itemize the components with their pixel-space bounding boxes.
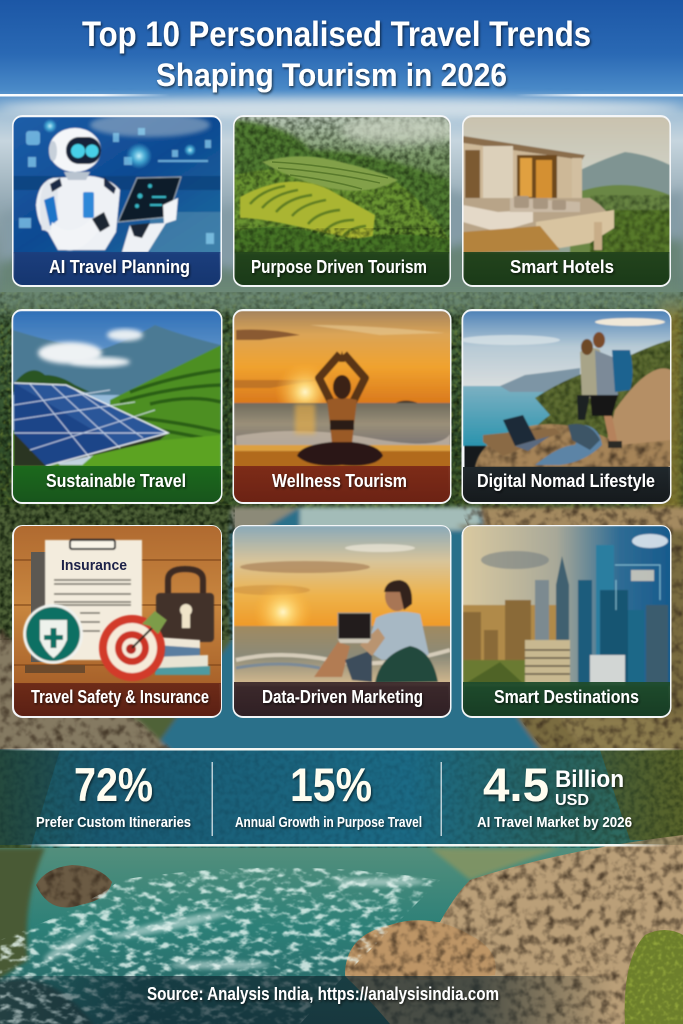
stat: 15%: Annual Growth in Purpose Travel bbox=[235, 814, 422, 831]
source bar: Source: Analysis India, https://analysisindia.com bbox=[147, 984, 499, 1004]
panel: Purpose Driven Tourism bbox=[234, 116, 460, 286]
title bbox=[82, 15, 591, 93]
image: solar panels and green terraces bbox=[13, 311, 222, 467]
panel: Travel Safety & Insurance bbox=[14, 526, 222, 718]
label: Digital Nomad Lifestyle: Digital Nomad Lifestyle bbox=[477, 471, 655, 491]
caption bar bbox=[463, 467, 671, 504]
label: AI Travel Planning: AI Travel Planning bbox=[49, 257, 190, 277]
title: Top 10 Personalised Travel Trends bbox=[82, 15, 591, 54]
stat: 4.5 Billion USD: 4.5 bbox=[483, 758, 549, 811]
icon: padlock bbox=[156, 569, 214, 642]
caption bar bbox=[234, 466, 451, 504]
standing travellers bbox=[580, 347, 601, 399]
icon: stack of books bbox=[155, 637, 210, 675]
stat: 4.5 Billion USD: Billion bbox=[555, 766, 624, 793]
caption bar bbox=[13, 466, 222, 504]
label: Smart Hotels: Smart Hotels bbox=[510, 257, 614, 277]
laptop and table bbox=[483, 428, 560, 456]
robot tablet bbox=[118, 177, 181, 222]
label: Data-Driven Marketing: Data-Driven Marketing bbox=[262, 687, 423, 707]
image: futuristic city skyline bbox=[463, 526, 671, 686]
heading rule: left bbox=[0, 94, 170, 96]
panel: Data-Driven Marketing bbox=[230, 526, 451, 718]
stat: 15% bbox=[235, 758, 422, 831]
label: Purpose Driven Tourism: Purpose Driven Tourism bbox=[251, 257, 427, 277]
panel: Smart Hotels bbox=[463, 116, 670, 286]
panel: key statistics bbox=[0, 748, 683, 846]
caption bar bbox=[463, 252, 670, 286]
image: robot with tablet bbox=[13, 113, 221, 253]
foam bands bbox=[42, 878, 425, 969]
stat: 72%: Prefer Custom Itineraries bbox=[36, 814, 191, 831]
document heading: Insurance bbox=[61, 558, 127, 574]
caption bar bbox=[14, 683, 222, 718]
caption bar bbox=[234, 682, 451, 718]
panel: Sustainable Travel bbox=[13, 310, 222, 504]
caption bar bbox=[234, 252, 450, 286]
icon: target with arrow bbox=[99, 611, 167, 681]
panel: AI Travel Planning bbox=[13, 113, 221, 286]
label: Sustainable Travel: Sustainable Travel bbox=[46, 471, 186, 491]
backdrop behind stats bbox=[0, 750, 683, 850]
stat: 4.5 Billion USD: USD bbox=[555, 792, 589, 809]
source bar bbox=[0, 976, 683, 1024]
robot body bbox=[36, 176, 120, 250]
backpack bbox=[375, 646, 438, 683]
stat: 72% bbox=[36, 758, 191, 831]
heading rule: right bbox=[515, 94, 683, 96]
stat: 4.5 Billion USD: AI Travel Market by 2026 bbox=[477, 814, 632, 831]
image: nomads overlooking the coast bbox=[460, 311, 671, 467]
title: Shaping Tourism in 2026 bbox=[156, 57, 507, 93]
image: rice terraces bbox=[234, 116, 460, 253]
label: Wellness Tourism: Wellness Tourism bbox=[272, 471, 407, 491]
panel: Smart Destinations bbox=[463, 526, 671, 718]
caption bar bbox=[463, 682, 671, 718]
image: man with laptop on the beach bbox=[230, 526, 451, 686]
seated traveller bbox=[535, 425, 602, 465]
caption bar bbox=[13, 252, 221, 286]
stat: 72%: 72% bbox=[74, 758, 153, 811]
stat: 15%: 15% bbox=[290, 758, 372, 811]
laptop bbox=[338, 613, 371, 639]
label: Travel Safety & Insurance: Travel Safety & Insurance bbox=[31, 687, 209, 707]
stat: 4.5 Billion USD bbox=[477, 758, 632, 831]
insurance document bbox=[45, 540, 142, 660]
seated man bbox=[314, 642, 350, 677]
panel: Digital Nomad Lifestyle bbox=[460, 310, 671, 504]
icon: medical shield bbox=[23, 604, 83, 664]
image: insurance document on a desk bbox=[14, 526, 222, 684]
image: yoga silhouette at sunset bbox=[234, 311, 451, 467]
panel: Wellness Tourism bbox=[234, 310, 451, 504]
image: luxury hotel on a hillside bbox=[463, 117, 670, 253]
meditating figure bbox=[319, 354, 365, 402]
label: Smart Destinations: Smart Destinations bbox=[494, 687, 639, 707]
